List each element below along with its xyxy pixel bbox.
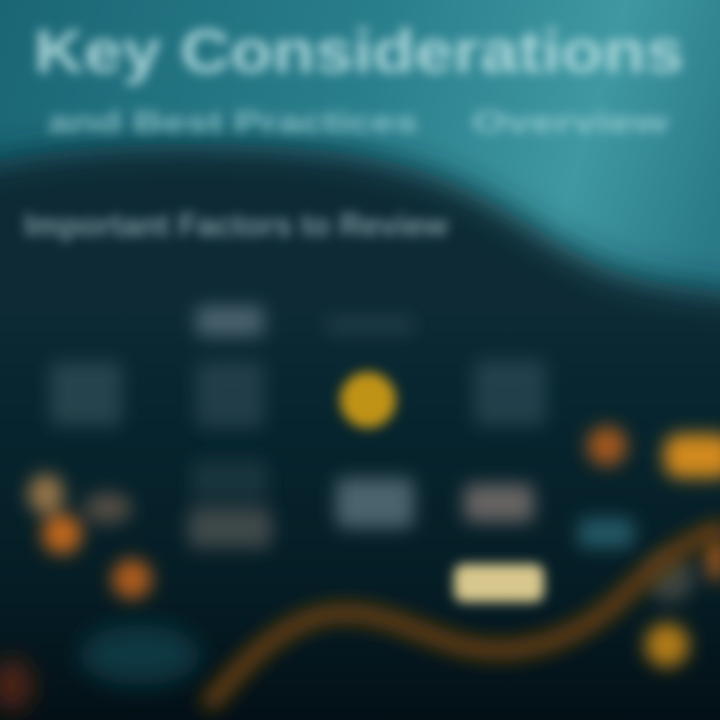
dark ground base: [0, 690, 720, 720]
subtitle: Overview: [472, 106, 669, 139]
subtitle: [48, 106, 669, 139]
winding orange path: [212, 530, 718, 700]
orange lights right: [587, 426, 720, 667]
item lower centre warm: [188, 508, 272, 548]
section heading: Important Factors to Review: [24, 207, 448, 243]
item label top right: [326, 318, 414, 332]
dark mountain silhouette: [0, 120, 720, 386]
teal patch bottom left: [80, 625, 200, 685]
title: Key Considerations: [34, 18, 684, 85]
grid of muted items: [50, 306, 634, 548]
ember bottom left: [0, 659, 32, 711]
item label top: [196, 306, 264, 336]
background sky: [0, 0, 720, 313]
item lower middle: [336, 478, 414, 528]
cream label: [454, 564, 544, 602]
orange lights left: [28, 474, 152, 599]
item left: [50, 362, 122, 426]
item lower right: [464, 484, 534, 522]
subtitle: and Best Practices: [48, 106, 418, 139]
icon: yellow circle: [340, 372, 396, 428]
item right: [474, 360, 546, 426]
item lower centre: [192, 460, 268, 500]
item centre: [196, 362, 264, 428]
item lower right teal: [578, 518, 634, 548]
